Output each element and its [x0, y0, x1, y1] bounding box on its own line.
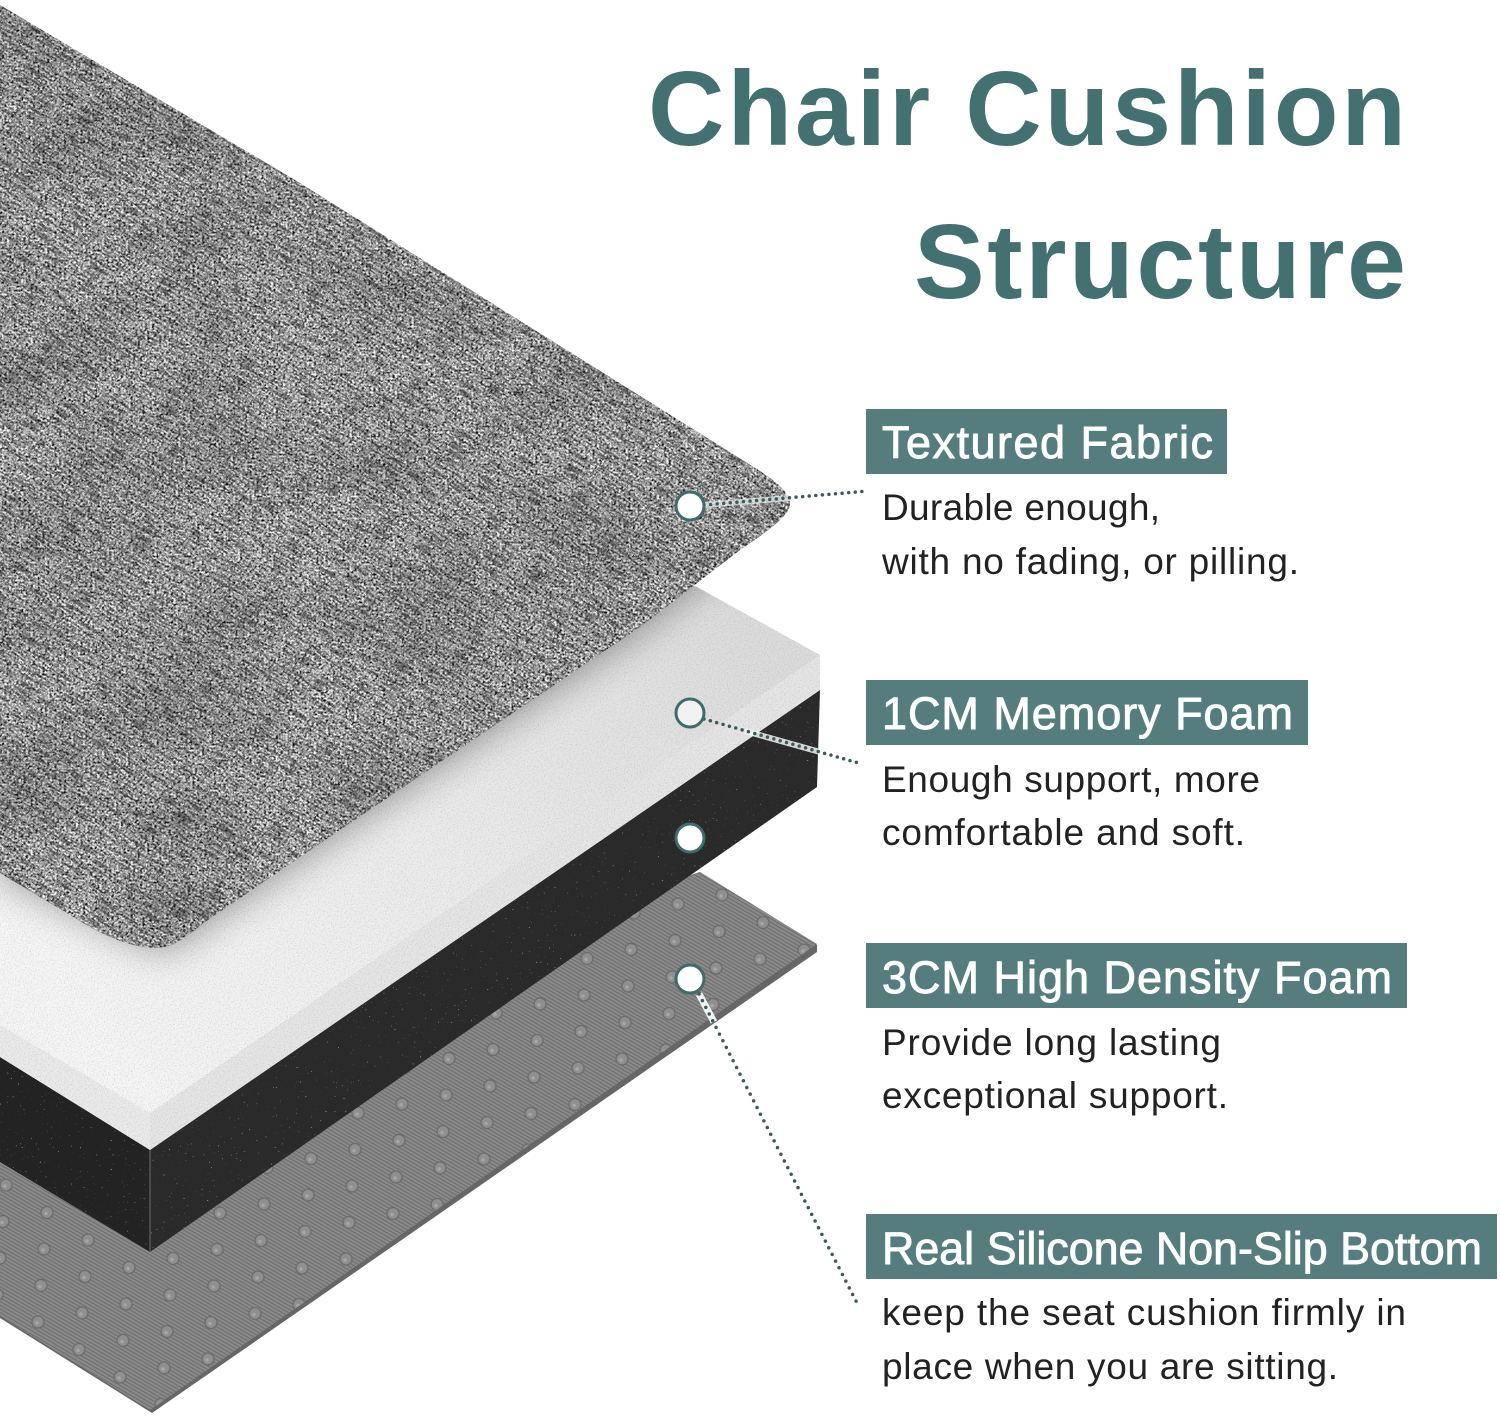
marker: silicone bottom	[676, 965, 704, 993]
description: textured fabric: Durable enough,	[882, 487, 1160, 528]
layer: non-slip silicone bottom sheet	[0, 860, 830, 1415]
description: textured fabric	[881, 487, 1299, 582]
marker: memory foam	[676, 699, 704, 727]
layer: memory foam	[0, 586, 820, 1150]
callout: memory foam	[866, 680, 1308, 853]
description: high density foam	[882, 1022, 1228, 1116]
description: silicone bottom: keep the seat cushion firmly in	[882, 1292, 1406, 1333]
title: Chair Cushion	[648, 50, 1406, 168]
description: memory foam: comfortable and soft.	[882, 812, 1245, 853]
leader line: silicone bottom	[699, 994, 857, 1303]
callout: textured fabric	[866, 409, 1299, 582]
label bar: textured fabric: Textured Fabric	[882, 417, 1213, 468]
description: high density foam: exceptional support.	[882, 1075, 1228, 1116]
description: textured fabric: with no fading, or pilling.	[881, 541, 1299, 582]
leader line: memory foam	[704, 719, 862, 764]
description: high density foam: Provide long lasting	[882, 1022, 1221, 1063]
description: silicone bottom: place when you are sitting.	[882, 1346, 1338, 1387]
title	[648, 50, 1406, 321]
marker: fabric	[676, 492, 704, 520]
leader line: fabric	[704, 491, 868, 505]
label bar: silicone bottom: Real Silicone Non-Slip Bottom	[882, 1223, 1482, 1274]
layer: high density foam	[0, 680, 830, 1260]
description: memory foam	[882, 759, 1260, 853]
label bar: high density foam: 3CM High Density Foam	[882, 952, 1392, 1003]
description: memory foam: Enough support, more	[882, 759, 1260, 800]
description: silicone bottom	[882, 1292, 1406, 1387]
callout: high density foam	[866, 943, 1407, 1116]
callout: silicone bottom	[866, 1214, 1497, 1387]
marker: high density foam	[676, 824, 704, 852]
title: Structure	[914, 203, 1406, 321]
label bar: memory foam: 1CM Memory Foam	[882, 688, 1293, 739]
layer: textured fabric	[0, 5, 790, 948]
